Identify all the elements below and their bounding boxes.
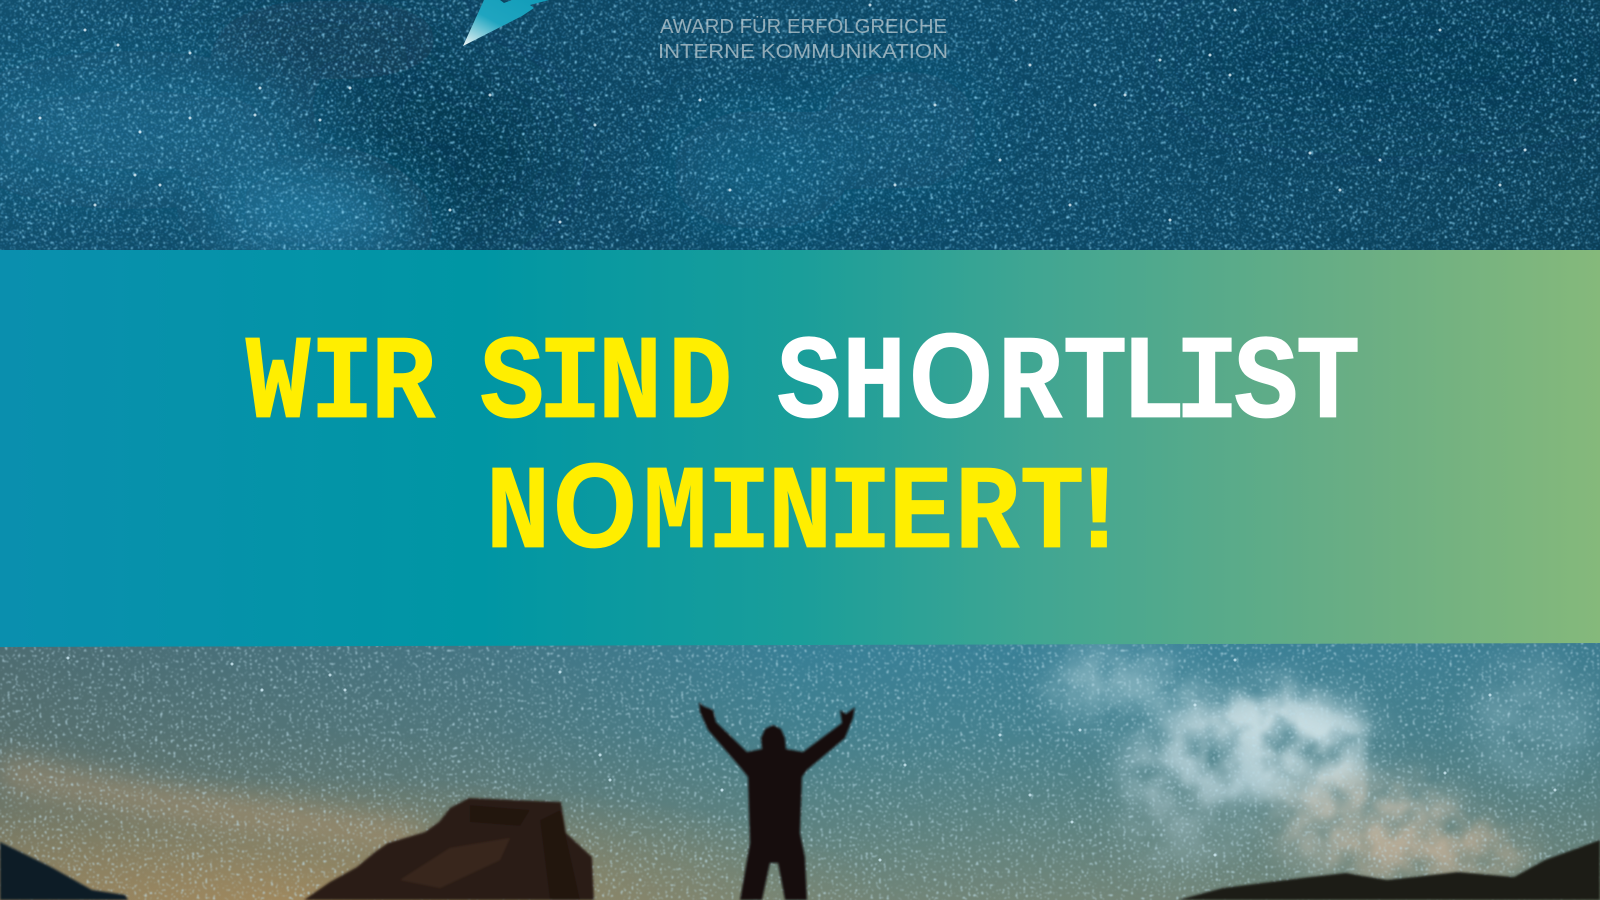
star field: lower sky bbox=[0, 640, 1600, 900]
nebula: milky way glow bbox=[0, 4, 952, 250]
headline word: SIND: SIND bbox=[480, 318, 732, 454]
mountain: left ridge bbox=[0, 842, 128, 900]
panel: lower starry sky bbox=[0, 640, 1600, 900]
headline word: SHORTLIST: SHORTLIST bbox=[777, 310, 1360, 454]
star field: upper sky bbox=[0, 0, 1600, 250]
panel: upper starry sky bbox=[0, 0, 1600, 255]
horizon glow: warm light bbox=[0, 795, 782, 900]
logo caption: award name bbox=[658, 16, 948, 63]
rock outcrop bbox=[304, 798, 594, 900]
logo: award arrow icon bbox=[463, 0, 549, 46]
panel: gradient headline band bbox=[0, 250, 1600, 647]
headline word: WIR: WIR bbox=[246, 318, 436, 454]
logo caption: award name: INTERNE KOMMUNIKATION bbox=[658, 41, 948, 63]
silhouette: person with raised arms bbox=[699, 702, 855, 900]
heading: headline bbox=[246, 310, 1360, 584]
logo caption: award name: AWARD FÜR ERFOLGREICHE bbox=[660, 16, 947, 38]
mountain: right ridge bbox=[1178, 840, 1600, 900]
light streak over the horizon bbox=[0, 758, 420, 846]
headline line two: NOMINIERT!: NOMINIERT! bbox=[486, 440, 1131, 584]
milky way cloud bbox=[1045, 645, 1590, 880]
